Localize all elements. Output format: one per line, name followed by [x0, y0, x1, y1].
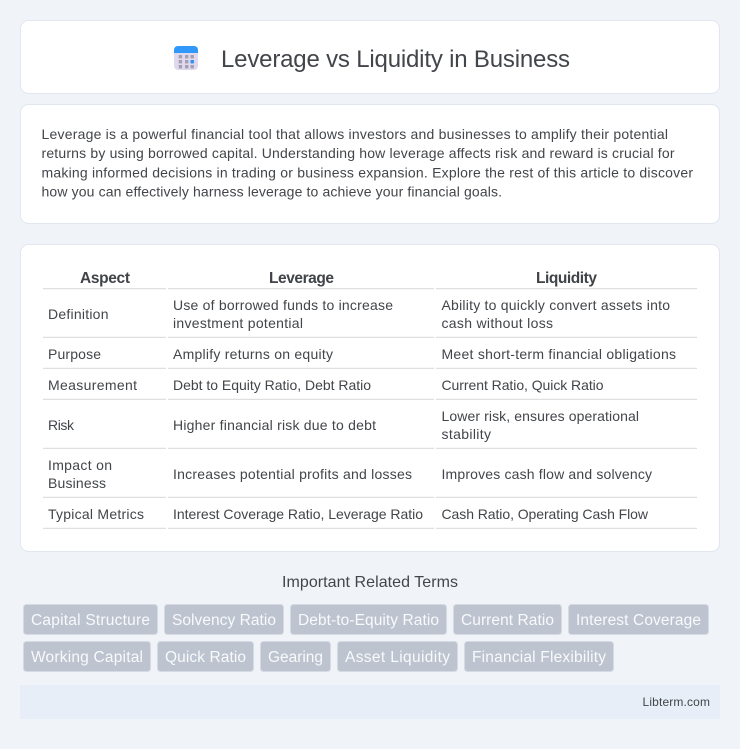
table row: purpose: Amplify returns on equity — [173, 346, 333, 362]
table row: definition: Definition — [48, 306, 108, 322]
tag: asset liquidity: Asset Liquidity — [345, 649, 450, 666]
table row: typical metrics: Interest Coverage Ratio, Leverage Ratio — [173, 506, 423, 522]
tag: gearing: Gearing — [268, 649, 323, 666]
panel: introduction — [20, 104, 720, 224]
table row: impact on business: Improves cash flow and solvency — [442, 466, 652, 482]
tag: asset liquidity — [338, 642, 458, 672]
table row: typical metrics: Cash Ratio, Operating Cash Flow — [442, 506, 649, 522]
table row: purpose: Purpose — [48, 346, 101, 362]
tag: quick ratio — [158, 642, 254, 672]
tag: solvency ratio: Solvency Ratio — [172, 612, 276, 629]
tag: working capital — [24, 642, 150, 672]
table row: risk: Risk — [48, 417, 75, 433]
table row: definition — [48, 297, 670, 331]
table row: risk: stability — [442, 426, 491, 442]
table row: measurement: Current Ratio, Quick Ratio — [442, 377, 604, 393]
table header row — [80, 270, 597, 287]
table header row: Aspect — [80, 270, 130, 287]
icon: calendar — [174, 46, 198, 70]
table header row: Liquidity — [536, 270, 597, 287]
text block: introduction paragraph: Leverage is a powerful financial tool that allows investors and businesses to amplify their potential — [42, 126, 668, 142]
tag: current ratio: Current Ratio — [461, 612, 554, 629]
footer credit: Libterm.com — [642, 695, 710, 709]
table row: purpose — [48, 346, 676, 362]
table row: definition: Ability to quickly convert assets into — [442, 297, 670, 313]
tag: financial flexibility: Financial Flexibility — [472, 649, 606, 666]
text block: introduction paragraph: how you can effectively harness leverage to achieve your financial goals. — [42, 184, 502, 200]
table row: typical metrics: Typical Metrics — [48, 506, 144, 522]
tag: debt-to-equity ratio — [290, 604, 446, 634]
panel: comparison table — [20, 244, 720, 552]
tag list: related terms — [24, 604, 708, 672]
table row: typical metrics — [48, 506, 649, 522]
tag: interest coverage: Interest Coverage — [576, 612, 701, 629]
footer — [20, 685, 720, 719]
table row: definition: Use of borrowed funds to increase — [173, 297, 393, 313]
heading: important related terms: Important Related Terms — [282, 574, 458, 591]
tag: working capital: Working Capital — [31, 649, 143, 666]
table row: impact on business: Business — [48, 475, 106, 491]
tag: interest coverage — [568, 604, 708, 634]
table header row: Leverage — [269, 270, 334, 287]
table row: purpose: Meet short-term financial obligations — [442, 346, 676, 362]
tag: current ratio — [454, 604, 562, 634]
panel: title header — [20, 20, 720, 94]
text block: introduction paragraph — [42, 126, 693, 200]
tag: gearing — [260, 642, 330, 672]
tag: quick ratio: Quick Ratio — [165, 649, 246, 666]
table row: impact on business — [48, 457, 652, 491]
table row: risk: Higher financial risk due to debt — [173, 417, 376, 433]
title: Leverage vs Liquidity in Business — [221, 46, 570, 73]
text block: introduction paragraph: making informed decisions in trading or business expansion. Explore the rest of this article to discover — [42, 164, 693, 180]
table row: risk — [48, 408, 639, 442]
tag: solvency ratio — [164, 604, 284, 634]
text block: introduction paragraph: returns by using borrowed capital. Understanding how leverage affects risk and reward is crucial for — [42, 145, 675, 161]
table row: measurement — [48, 377, 604, 393]
tag: capital structure — [24, 604, 158, 634]
tag: financial flexibility — [464, 642, 614, 672]
table row: risk: Lower risk, ensures operational — [442, 408, 639, 424]
table row: impact on business: Increases potential profits and losses — [173, 466, 412, 482]
tag: capital structure: Capital Structure — [31, 612, 150, 629]
table row: definition: cash without loss — [442, 315, 553, 331]
table row: definition: investment potential — [173, 315, 303, 331]
tag: debt-to-equity ratio: Debt-to-Equity Ratio — [298, 612, 439, 629]
table row: measurement: Debt to Equity Ratio, Debt Ratio — [173, 377, 371, 393]
table row: measurement: Measurement — [48, 377, 137, 393]
table row: impact on business: Impact on — [48, 457, 112, 473]
